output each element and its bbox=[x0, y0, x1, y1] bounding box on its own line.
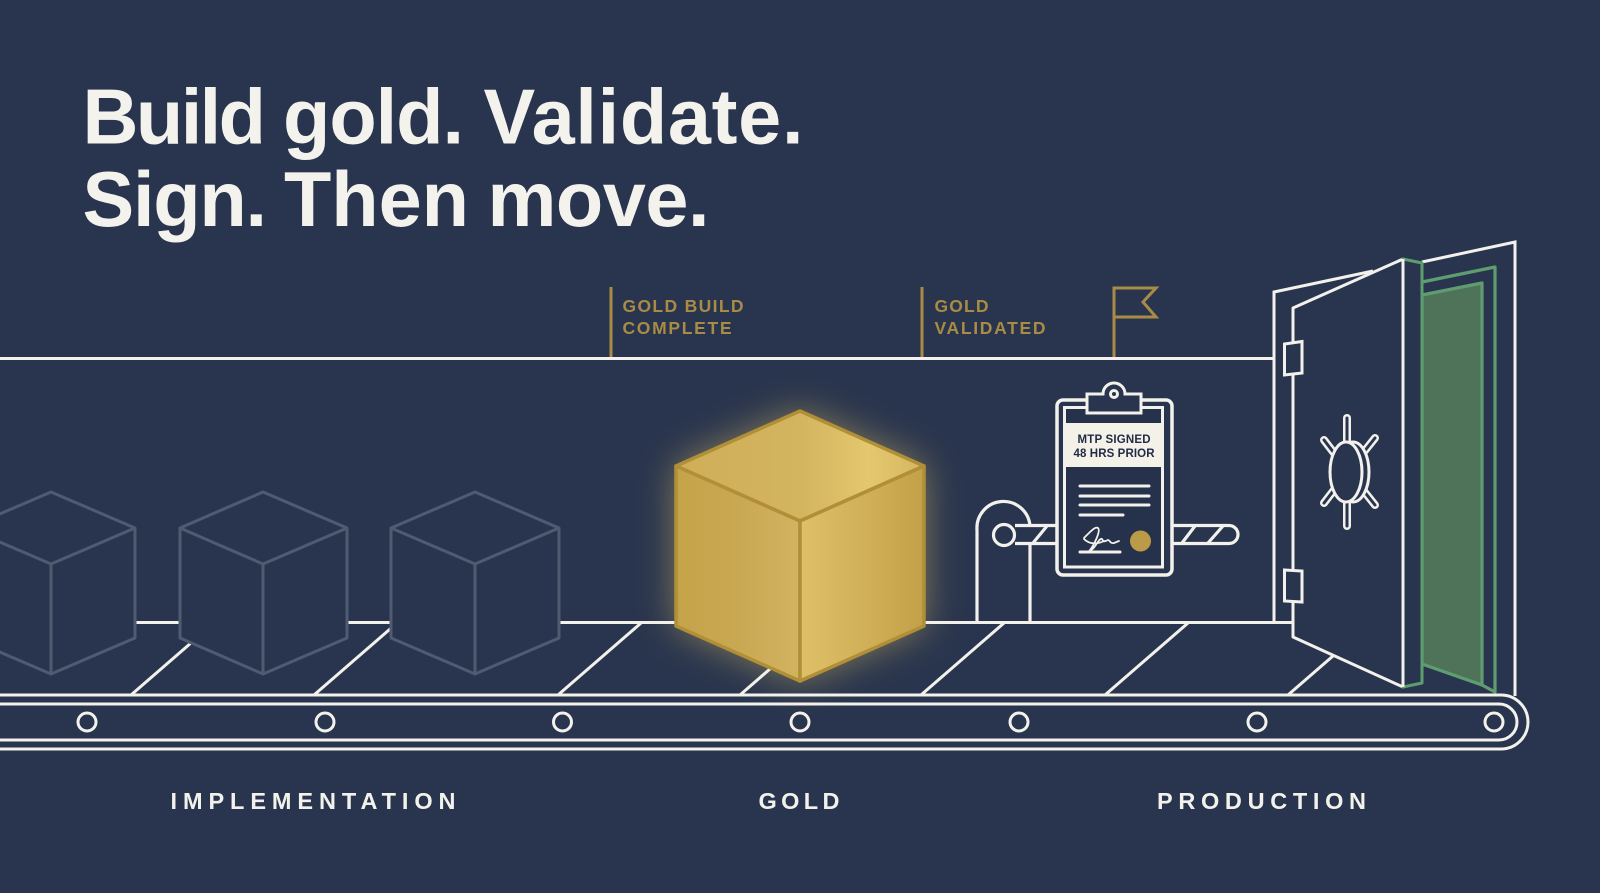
stage labels: PRODUCTION bbox=[1157, 788, 1366, 814]
stage labels: GOLD bbox=[758, 788, 840, 814]
stage labels: IMPLEMENTATION bbox=[170, 788, 456, 814]
vault wheel bbox=[1324, 418, 1375, 526]
milestone: gold build complete: COMPLETE bbox=[622, 318, 732, 338]
milestone: gold validated: VALIDATED bbox=[934, 318, 1046, 338]
vault door bbox=[1284, 259, 1422, 687]
hinge top bbox=[1284, 342, 1302, 375]
outline cube 1 bbox=[0, 492, 135, 674]
gold seal bbox=[1130, 530, 1151, 552]
title: move. bbox=[488, 157, 710, 243]
title bbox=[82, 74, 804, 243]
vault interior green bbox=[1422, 267, 1495, 692]
stage labels bbox=[170, 788, 1366, 814]
outline cube 2 bbox=[180, 492, 347, 674]
clipboard clip bbox=[1087, 383, 1141, 413]
clipboard paper heading bbox=[1066, 423, 1162, 467]
document text lines bbox=[1080, 486, 1149, 552]
milestone: gold build complete bbox=[611, 287, 744, 357]
gold glow bbox=[676, 411, 924, 681]
title: Then bbox=[284, 157, 469, 243]
title: Sign. bbox=[82, 157, 267, 243]
gold cube bbox=[676, 411, 924, 681]
conveyor belt bbox=[0, 695, 1528, 749]
vault frame bbox=[1274, 242, 1515, 696]
floor line bbox=[0, 621, 1293, 624]
clipboard: MTP signed bbox=[1057, 383, 1172, 575]
icon: flag bbox=[1114, 288, 1156, 357]
signature bbox=[1084, 528, 1119, 550]
milestone: gold validated bbox=[922, 287, 1046, 357]
milestone: gold validated: GOLD bbox=[934, 296, 988, 316]
hinge bottom bbox=[1284, 570, 1302, 602]
conveyor slats bbox=[131, 623, 1371, 695]
barrier gate bbox=[977, 501, 1238, 622]
upper rail bbox=[0, 357, 1274, 360]
milestone: gold build complete: GOLD BUILD bbox=[622, 296, 744, 316]
title: Validate. bbox=[484, 74, 804, 160]
outline cube 3 bbox=[391, 492, 559, 674]
title: Build bbox=[82, 74, 266, 160]
title: gold. bbox=[283, 74, 464, 160]
clipboard paper heading: 48 HRS PRIOR bbox=[1074, 448, 1155, 460]
clipboard paper heading: MTP SIGNED bbox=[1078, 434, 1150, 446]
door edge bbox=[1403, 259, 1422, 687]
